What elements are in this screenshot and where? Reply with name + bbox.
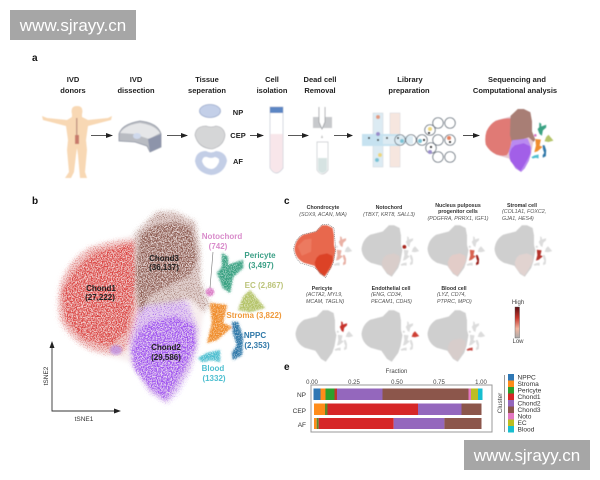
feature plot: nucleus pulposus progenitor cells: progenitor cells (438, 209, 478, 215)
feature plot: chondrocyte: (SOX9, ACAN, MIA) (299, 212, 347, 218)
panel letter e: e (284, 362, 290, 373)
feature plot: endothelial cell: (ENG, CD34, (371, 292, 402, 298)
icon: centrifuge tube (270, 107, 283, 173)
feature plot: blood cell: PTPRC, MPO) (437, 299, 472, 305)
watermark bottom: www.sjrayy.cn (473, 446, 580, 465)
panel letter b: b (32, 196, 38, 207)
cluster legend: Chond1 (518, 394, 541, 401)
feature plot: pericyte: MCAM, TAGLN) (306, 299, 344, 305)
feature plot: endothelial cell: Endothelial cell (372, 286, 411, 292)
stacked bar chart: Fraction (386, 369, 407, 375)
feature plot: stromal cell: Stromal cell (507, 203, 538, 209)
cluster labels: Blood (202, 364, 224, 373)
icon: human donor (42, 106, 112, 178)
cluster legend: Chond2 (518, 400, 541, 408)
feature plot: blood cell: (LYZ, CD74, (437, 292, 466, 298)
cluster labels: (27,222) (85, 293, 115, 302)
tissue labels: CEP (230, 131, 246, 140)
feature plot: chondrocyte (294, 205, 352, 278)
feature plot: blood cell: Blood cell (441, 286, 467, 292)
step headings: dissection (117, 86, 155, 95)
tSNE axes: tSNE1 (75, 416, 94, 423)
icon: microfluidic library preparation (362, 113, 455, 167)
stacked bar chart: AF (298, 422, 306, 429)
feature plot: pericyte (296, 286, 353, 362)
step headings: IVD (130, 75, 143, 84)
watermark bottom (464, 440, 590, 470)
cluster labels: (29,586) (151, 353, 181, 362)
cluster labels: (742) (209, 242, 228, 251)
cluster legend: Cluster (497, 392, 504, 413)
cluster labels: EC (2,867) (245, 281, 284, 290)
step headings: Dead cell (304, 75, 336, 84)
step headings: Library (397, 75, 424, 84)
step headings: IVD (67, 75, 80, 84)
color scale legend (512, 300, 524, 345)
feature plot: stromal cell (495, 203, 552, 277)
NP bar (314, 388, 482, 400)
AF bar (314, 418, 482, 429)
stacked bar chart (293, 369, 492, 432)
stacked bar chart: 0.50 (391, 380, 403, 386)
feature plot: stromal cell: GJA1, HES4) (502, 216, 534, 222)
icon: dead cell removal (313, 107, 332, 174)
cluster labels: Pericyte (244, 251, 276, 260)
feature plot: stromal cell: (COL1A1, FOXC2, (502, 209, 546, 215)
feature plot: endothelial cell (362, 286, 419, 362)
cluster legend: Stroma (518, 381, 539, 388)
panel e: cluster fractions (284, 362, 542, 434)
cluster legend (497, 374, 542, 434)
cluster legend: NPPC (518, 374, 536, 382)
feature plot: nucleus pulposus progenitor cells (428, 203, 489, 277)
feature plot: notochord: Notochord (376, 205, 402, 211)
chart: tSNE scatter (58, 212, 265, 403)
cluster labels: (1332) (202, 374, 226, 383)
cluster labels: (2,353) (244, 341, 270, 350)
tissue labels: NP (233, 108, 243, 117)
feature plot: pericyte: Pericyte (312, 286, 332, 292)
cluster labels: (3,497) (248, 261, 274, 270)
cluster legend: Noto (518, 414, 532, 420)
step headings: Sequencing and (488, 75, 546, 84)
panel letter c: c (284, 196, 290, 207)
cluster legend: Chond3 (518, 407, 541, 414)
watermark top: www.sjrayy.cn (19, 16, 126, 35)
step headings (60, 75, 557, 95)
step headings: Cell (265, 75, 279, 84)
stacked bar chart: 0.00 (306, 380, 318, 386)
icon: NP disc (200, 104, 220, 118)
cluster legend: Pericyte (518, 388, 542, 394)
icon: AF disc (195, 151, 227, 175)
stacked bar chart: 0.75 (433, 380, 445, 386)
feature plot: blood cell (428, 286, 485, 362)
panel b: tSNE cluster map (32, 196, 284, 423)
step headings: isolation (257, 86, 288, 95)
notochord leader line (210, 252, 213, 288)
tSNE axes: tSNE2 (43, 366, 50, 385)
step headings: Tissue (195, 75, 219, 84)
cluster labels: Chond1 (86, 284, 116, 293)
icon: IVD dissection (119, 121, 161, 152)
panel c: marker feature plots (284, 196, 552, 362)
feature plot: chondrocyte: Chondrocyte (307, 205, 339, 211)
feature plot: nucleus pulposus progenitor cells: (PDGFRA, PRRX1, IGF1) (428, 216, 489, 222)
feature plot: endothelial cell: PECAM1, CDH5) (371, 299, 412, 305)
cluster labels: Chond2 (151, 343, 181, 352)
panel a: workflow (32, 53, 557, 178)
stacked bar chart: NP (297, 392, 306, 399)
cluster labels (85, 232, 284, 383)
stacked bar chart: 0.25 (348, 380, 360, 386)
step headings: Computational analysis (473, 86, 557, 95)
color scale legend: High (512, 300, 524, 306)
feature plot: pericyte: (ACTA2, MYL9, (306, 292, 343, 298)
cluster legend: Blood (518, 426, 535, 434)
icon: CEP disc (195, 126, 225, 149)
feature plot: notochord: (TBXT, KRT8, SALL3) (363, 212, 415, 218)
cluster labels: NPPC (244, 331, 266, 340)
step headings: seperation (188, 86, 226, 95)
workflow arrows (91, 133, 480, 138)
color scale legend: Low (512, 339, 524, 345)
tissue labels (230, 108, 246, 166)
cluster legend: EC (518, 420, 527, 427)
feature plot: nucleus pulposus progenitor cells: Nucleus pulposus (435, 203, 481, 209)
panel letter a: a (32, 53, 38, 64)
stacked bar chart: CEP (293, 408, 306, 415)
watermark top (10, 10, 136, 40)
cluster labels: (36,137) (149, 263, 179, 272)
chart: overview tSNE (485, 109, 553, 172)
tissue labels: AF (233, 157, 243, 166)
feature plot: notochord (362, 205, 419, 277)
CEP bar (314, 404, 482, 415)
cluster labels: Stroma (3,822) (226, 311, 282, 320)
cluster labels: Chond3 (149, 254, 179, 263)
step headings: preparation (388, 86, 430, 95)
cluster labels: Notochord (202, 232, 242, 241)
tSNE axes (43, 341, 121, 423)
step headings: donors (60, 86, 86, 95)
stacked bar chart: 1.00 (475, 380, 487, 386)
step headings: Removal (304, 86, 336, 95)
